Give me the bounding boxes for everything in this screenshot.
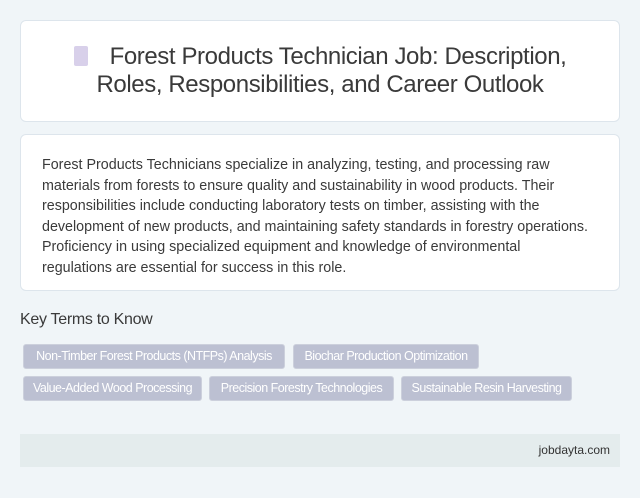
key terms heading: Key Terms to Know — [20, 311, 152, 328]
description card — [20, 134, 620, 291]
description text — [42, 157, 588, 276]
tags — [23, 344, 572, 401]
description text: regulations are essential for success in this role. — [42, 260, 346, 276]
tag 5 — [401, 376, 572, 401]
tag 2 — [293, 344, 479, 369]
footer — [20, 434, 620, 467]
title — [74, 43, 566, 98]
tag 1: Non-Timber Forest Products (NTFPs) Analysis — [36, 349, 272, 363]
tag 4 — [209, 376, 394, 401]
icon: document — [74, 46, 88, 66]
tag 4: Precision Forestry Technologies — [221, 381, 382, 395]
tag 2: Biochar Production Optimization — [304, 349, 468, 363]
description text: Forest Products Technicians specialize in analyzing, testing, and processing raw — [42, 157, 550, 173]
tag 3: Value-Added Wood Processing — [33, 381, 192, 395]
tag 5: Sustainable Resin Harvesting — [412, 381, 561, 395]
tag 1 — [23, 344, 285, 369]
header card — [20, 20, 620, 122]
description text: responsibilities include conducting laboratory tests on timber, assisting with the — [42, 198, 539, 214]
title: Forest Products Technician Job: Description, — [110, 43, 566, 70]
description text: materials from forests to ensure quality and sustainability in wood products. Their — [42, 178, 554, 194]
tag 3 — [23, 376, 202, 401]
title: Roles, Responsibilities, and Career Outlook — [96, 71, 544, 98]
description text: development of new products, and maintaining safety standards in forestry operations. — [42, 218, 588, 234]
description text: Proficiency in using specialized equipment and knowledge of environmental — [42, 239, 520, 255]
footer text: jobdayta.com — [539, 443, 610, 457]
